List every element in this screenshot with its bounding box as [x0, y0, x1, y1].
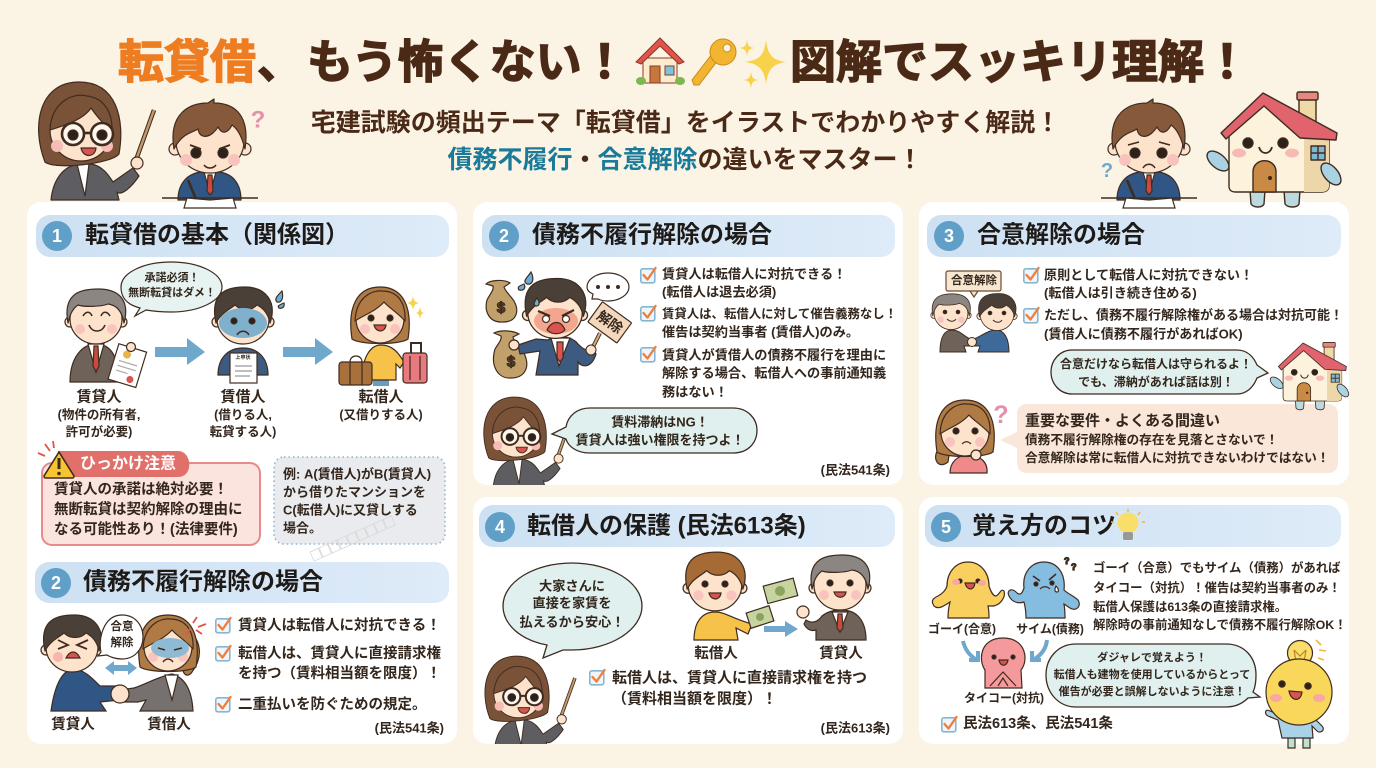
labels	[694, 644, 863, 662]
citation: (民法541条)	[375, 720, 444, 736]
speech bubble: mutual cancellation: 解除	[110, 635, 134, 649]
checklist: ただし、債務不履行解除権がある場合は対抗可能！	[1044, 308, 1343, 322]
illustration: angry lessor with sign: $	[497, 300, 506, 316]
title: 図解でスッキリ理解！	[790, 36, 1250, 88]
speech bubble: agreement protects sublessee: でも、滞納があれば話は別！	[1078, 374, 1234, 389]
speech bubble: pun tip	[1046, 644, 1260, 707]
arrow: double headed	[105, 661, 137, 675]
illustration: angry lessor with sign	[486, 272, 596, 378]
checklist: 原則として転借人に対抗できない！	[1044, 266, 1253, 282]
example box	[274, 457, 445, 544]
checklist: default cancellation	[216, 616, 441, 713]
checklist: default cancellation: を持つ（賃料相当額を限度）！	[238, 664, 441, 682]
labels: goi and saimu: サイム(債務)	[1016, 621, 1084, 636]
icon: house emoji	[636, 38, 685, 85]
speech bubble: landlord payment	[503, 563, 642, 658]
sign: cancellation	[586, 302, 632, 355]
speech bubble: landlord payment: 大家さんに	[539, 578, 605, 594]
person: lessor receiving	[797, 555, 871, 640]
text block: mnemonic: ゴーイ（合意）でもサイム（債務）があれば	[1093, 560, 1341, 575]
checklist	[1024, 266, 1343, 342]
character: saimu blue blob	[1008, 556, 1079, 618]
speech bubble: consent required: 承諾必須！	[144, 270, 200, 284]
arrow: payment	[764, 621, 798, 637]
callout: trap warning: ひっかけ注意	[80, 454, 176, 472]
label: lessor: (物件の所有者,	[58, 407, 140, 422]
icon: light bulb	[1111, 509, 1145, 540]
example box: 場合。	[283, 520, 322, 536]
heading	[927, 215, 1341, 257]
heading: 1 basics: 1	[52, 226, 62, 246]
heading: 2 default cancellation: 債務不履行解除の場合	[83, 568, 323, 596]
panel: 4 protection of sublessee	[473, 497, 903, 748]
panel: 1 basics and 2 default cancellation	[27, 202, 457, 744]
heading: 1 basics	[36, 215, 449, 257]
icon: floating banknote	[763, 578, 798, 604]
heading: 4	[495, 517, 505, 537]
callout: common mistakes: 重要な要件・よくある間違い	[1025, 412, 1220, 430]
labels: lessor and lessee: 賃借人	[147, 716, 191, 733]
heading: 覚え方のコツ	[972, 512, 1116, 540]
checklist: 務はない！	[662, 384, 728, 400]
teacher character	[485, 656, 575, 748]
checklist: (転借人は退去必須)	[662, 284, 776, 300]
citation: (民法613条)	[821, 720, 890, 736]
house character small	[1268, 342, 1351, 410]
heading: 5	[941, 517, 951, 537]
labels: lessor and lessee	[51, 715, 191, 733]
label: lessor: 許可が必要)	[66, 424, 132, 439]
labels: lessor and lessee: 賃貸人	[51, 715, 95, 733]
heading: 転借人の保護 (民法613条)	[527, 512, 806, 540]
character: saimu blue blob: ?	[1064, 556, 1070, 566]
sign: mutual cancellation: 合意解除	[951, 273, 997, 287]
text block: mnemonic: タイコー（対抗）！催告は契約当事者のみ！	[1093, 580, 1341, 595]
text block: mnemonic	[1093, 560, 1347, 632]
heading: 債務不履行解除の場合	[532, 222, 772, 248]
speech bubble: mutual cancellation	[98, 615, 143, 659]
icon: key emoji	[692, 39, 736, 85]
illustration: angry handshake	[41, 615, 206, 711]
checklist: 賃貸人は転借人に対抗できる！	[662, 266, 846, 282]
illustration: two people shaking hands	[931, 294, 1017, 352]
checklist: 催告は契約当事者 (賃借人)のみ。	[662, 324, 859, 340]
person: lessee with document: 上申状	[235, 354, 251, 361]
callout: trap warning	[38, 441, 260, 545]
callout: trap warning: 無断転貸は契約解除の理由に	[54, 500, 242, 518]
heading	[479, 505, 895, 547]
person: sublessee paying cash	[683, 552, 774, 640]
label: lessor: 賃貸人	[76, 388, 122, 406]
checklist: default cancellation: 二重払いを防ぐための規定。	[238, 695, 426, 713]
heading: 2 default cancellation: 2	[51, 573, 61, 593]
icon: sparkles emoji	[740, 40, 786, 88]
label: lessor	[58, 388, 140, 439]
callout: common mistakes: 合意解除は常に転借人に対抗できないわけではない！	[1025, 450, 1330, 465]
heading	[482, 215, 895, 257]
label: lessee	[210, 388, 276, 439]
heading	[925, 505, 1341, 547]
example box: から借りたマンションを	[283, 484, 426, 500]
speech bubble: pun tip: 転借人も建物を使用しているからとって	[1054, 667, 1250, 681]
character: light bulb mascot	[1266, 640, 1332, 748]
arrow: goi to taiko	[963, 641, 978, 660]
decorative tofu row	[310, 516, 395, 561]
speech bubble: agreement protects sublessee: 合意だけなら転借人は守られるよ！	[1060, 356, 1252, 371]
checklist	[590, 668, 867, 708]
illustration: angry lessor with sign: $	[507, 354, 516, 370]
citation: (民法541条)	[821, 462, 890, 478]
person: lessor with document	[65, 289, 147, 388]
character: taiko pink blob	[981, 638, 1025, 688]
arrow: lessee to sublessee	[283, 338, 333, 365]
callout: trap warning: 賃貸人の承諾は絶対必要！	[54, 480, 228, 498]
checklist: 賃貸人が賃借人の債務不履行を理由に	[662, 346, 886, 362]
callout: common mistakes: 債務不履行解除権の存在を見落とさないで！	[1025, 432, 1278, 447]
house character	[1204, 92, 1345, 207]
arrow: lessor to lessee	[155, 338, 205, 365]
speech bubble: mutual cancellation: 合意	[110, 619, 134, 633]
text block: mnemonic: 解除時の事前通知なしで債務不履行解除OK！	[1093, 617, 1347, 632]
label: lessee: (借りる人,	[214, 407, 272, 422]
callout: trap warning: なる可能性あり！(法律要件)	[54, 520, 238, 538]
teacher character	[484, 397, 571, 487]
checklist: default cancellation: 転借人は、賃貸人に直接請求権	[238, 644, 441, 662]
sign: cancellation: 解除	[594, 307, 626, 337]
panel: 3 mutual cancellation	[919, 202, 1351, 485]
speech bubble: consent required: 無断転貸はダメ！	[128, 285, 216, 299]
checklist: （賃料相当額を限度）！	[612, 690, 777, 708]
label: sublessee	[339, 388, 423, 422]
labels: 賃貸人	[819, 644, 863, 662]
subtitle: 宅建試験の頻出テーマ「転貸借」をイラストでわかりやすく解説！	[311, 109, 1060, 137]
labels: goi and saimu: ゴーイ(合意)	[928, 621, 996, 636]
speech bubble: rent arrears	[552, 408, 757, 453]
checklist: 解除する場合、転借人への事前通知義	[662, 364, 886, 380]
character: saimu blue blob: ?	[1071, 562, 1076, 572]
student character confident	[162, 99, 265, 208]
heading: 合意解除の場合	[977, 222, 1145, 248]
speech bubble: ellipsis	[587, 273, 629, 301]
title	[118, 36, 1250, 88]
student character confident: ?	[251, 106, 265, 134]
title: もう怖くない！	[307, 36, 628, 88]
question mark: ?	[993, 401, 1009, 429]
panel: 2 default cancellation	[473, 202, 903, 487]
checklist	[641, 266, 897, 400]
speech bubble: consent required	[121, 262, 222, 316]
woman wondering	[936, 400, 994, 473]
speech bubble: rent arrears: 賃貸人は強い権限を持つよ！	[575, 432, 745, 448]
title: 、	[257, 36, 303, 88]
label: lessee: 賃借人	[220, 388, 266, 406]
text block: mnemonic: 転借人保護は613条の直接請求権。	[1093, 599, 1287, 614]
heading: 2 default cancellation	[35, 562, 449, 603]
speech bubble: rent arrears: 賃料滞納はNG！	[611, 414, 709, 430]
example box: 例: A(賃借人)がB(賃貸人)	[283, 466, 431, 482]
teacher character	[39, 82, 154, 200]
subtitle	[311, 109, 1060, 174]
heading: 1 basics: 転貸借の基本（関係図）	[85, 222, 349, 248]
speech bubble: landlord payment: 直接を家賃を	[532, 594, 612, 610]
speech bubble: agreement protects sublessee	[1051, 350, 1268, 394]
labels: 転借人	[694, 645, 738, 662]
label: taiko: タイコー(対抗)	[964, 690, 1044, 705]
speech bubble: pun tip: 催告が必要と誤解しないように注意！	[1059, 684, 1245, 698]
title: 転貸借	[118, 36, 256, 88]
label: sublessee: (又借りする人)	[339, 407, 423, 422]
checklist: 転借人は、賃貸人に直接請求権を持つ	[612, 668, 867, 686]
checklist: default cancellation: 賃貸人は転借人に対抗できる！	[238, 616, 441, 634]
person: lessee with document	[212, 287, 284, 383]
example box: C(転借人)に又貸しする	[283, 502, 418, 518]
speech bubble: pun tip: ダジャレで覚えよう！	[1097, 650, 1207, 664]
checklist: (賃借人に債務不履行があればOK)	[1044, 326, 1243, 342]
label: sublessee: 転借人	[358, 388, 404, 406]
checklist: (転借人は引き続き住める)	[1044, 284, 1197, 300]
person: sublessee with luggage	[339, 287, 427, 386]
speech bubble: landlord payment: 払えるから安心！	[519, 614, 625, 630]
character: goi yellow blob	[932, 562, 1004, 618]
checklist: statutes: 民法613条、民法541条	[963, 715, 1113, 732]
arrow: saimu to taiko	[1032, 640, 1047, 660]
sign: mutual cancellation	[946, 271, 1001, 297]
panel: 5 memory tips	[919, 497, 1349, 748]
labels: goi and saimu	[928, 621, 1084, 636]
heading: 2	[499, 226, 509, 246]
student character puzzled	[1101, 99, 1197, 208]
heading: 3	[944, 226, 954, 246]
subtitle: 債務不履行・合意解除の違いをマスター！	[447, 146, 923, 174]
student character puzzled: ?	[1101, 160, 1113, 182]
label: lessee: 転貸する人)	[210, 424, 276, 439]
callout: common mistakes	[1000, 404, 1338, 473]
checklist: 賃貸人は、転借人に対して催告義務なし！	[662, 306, 897, 321]
